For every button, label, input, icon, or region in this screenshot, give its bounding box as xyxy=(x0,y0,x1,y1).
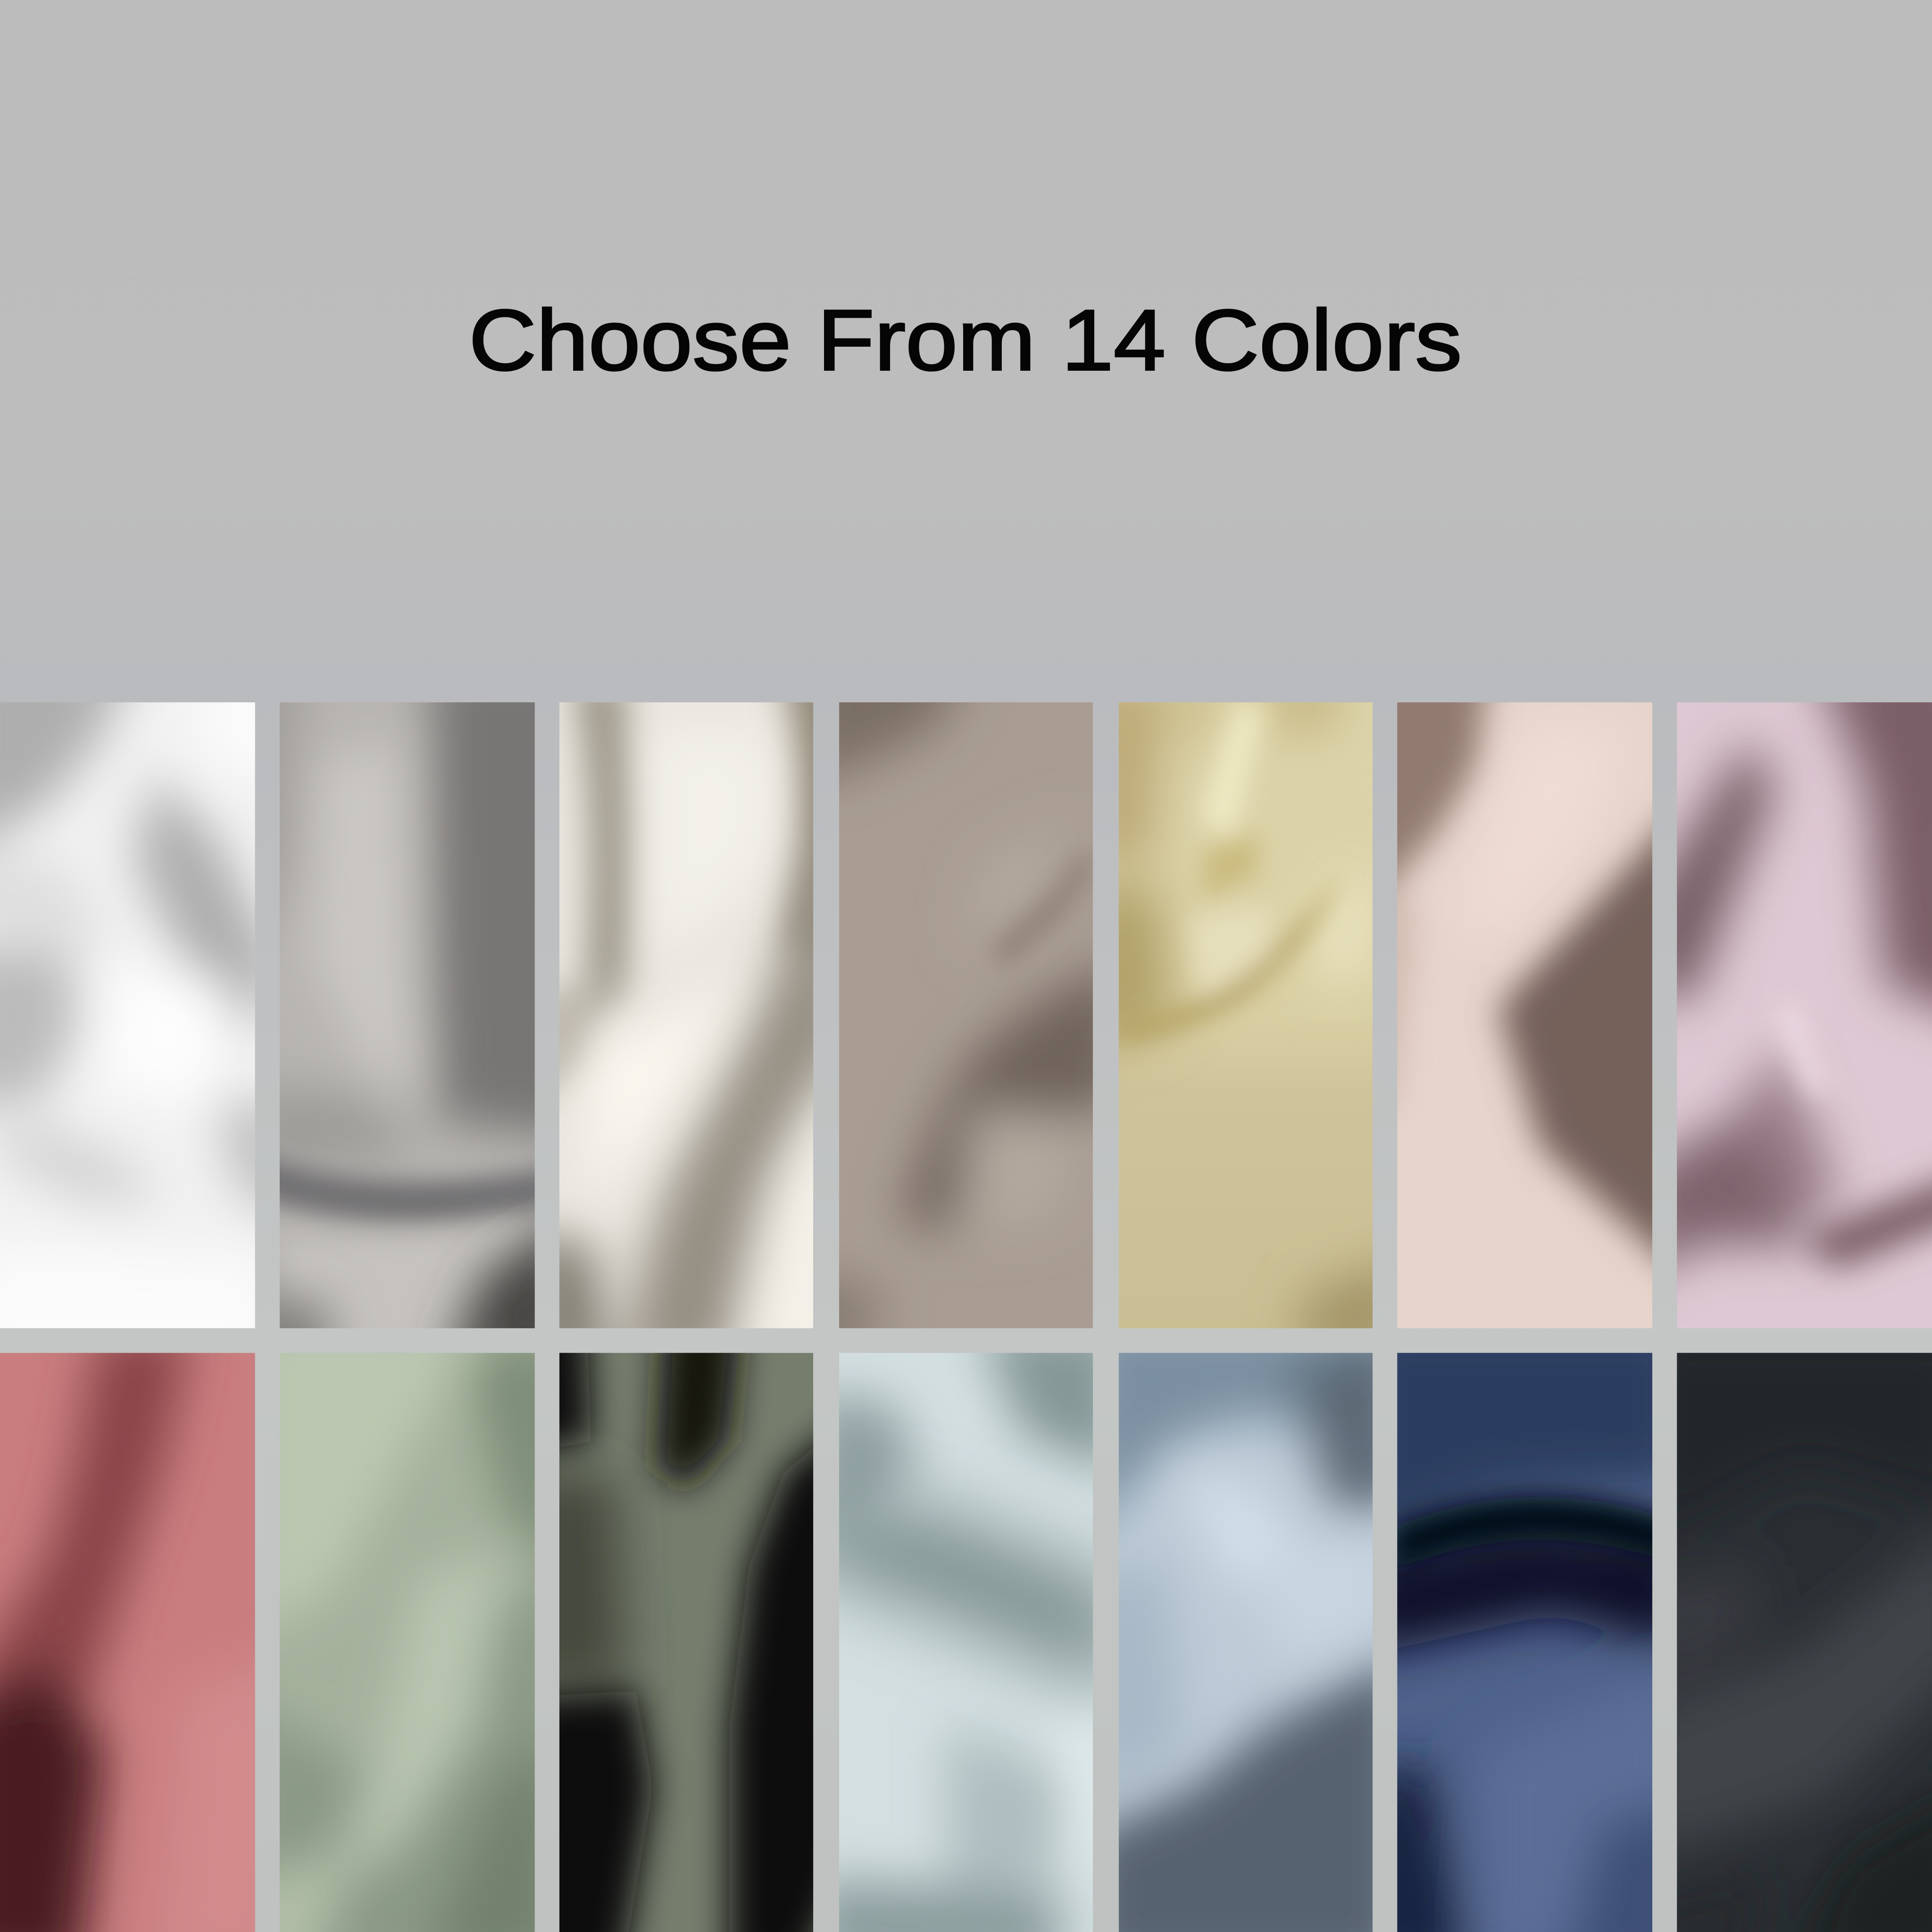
swatch: mauve xyxy=(1639,653,1932,1328)
swatch: taupe xyxy=(801,653,1121,1368)
swatch: navy xyxy=(1355,1318,1688,1932)
panel: top row of fabric swatches xyxy=(0,653,1932,1380)
swatch: charcoal xyxy=(1639,1331,1932,1932)
swatch: white xyxy=(0,653,296,1380)
title: Choose From 14 Colors xyxy=(469,291,1462,388)
swatch: pale aqua xyxy=(801,1324,1121,1932)
swatch: rose xyxy=(0,1331,296,1932)
swatch: ivory xyxy=(530,666,850,1368)
swatch: butter yellow xyxy=(1084,666,1405,1355)
swatch: gray xyxy=(234,653,591,1368)
swatch: olive xyxy=(517,1318,850,1932)
swatch: sage xyxy=(246,1318,567,1932)
panel: bottom row of fabric swatches xyxy=(0,1318,1932,1932)
swatch: steel blue xyxy=(1084,1318,1405,1932)
swatch: blush xyxy=(1355,666,1688,1328)
